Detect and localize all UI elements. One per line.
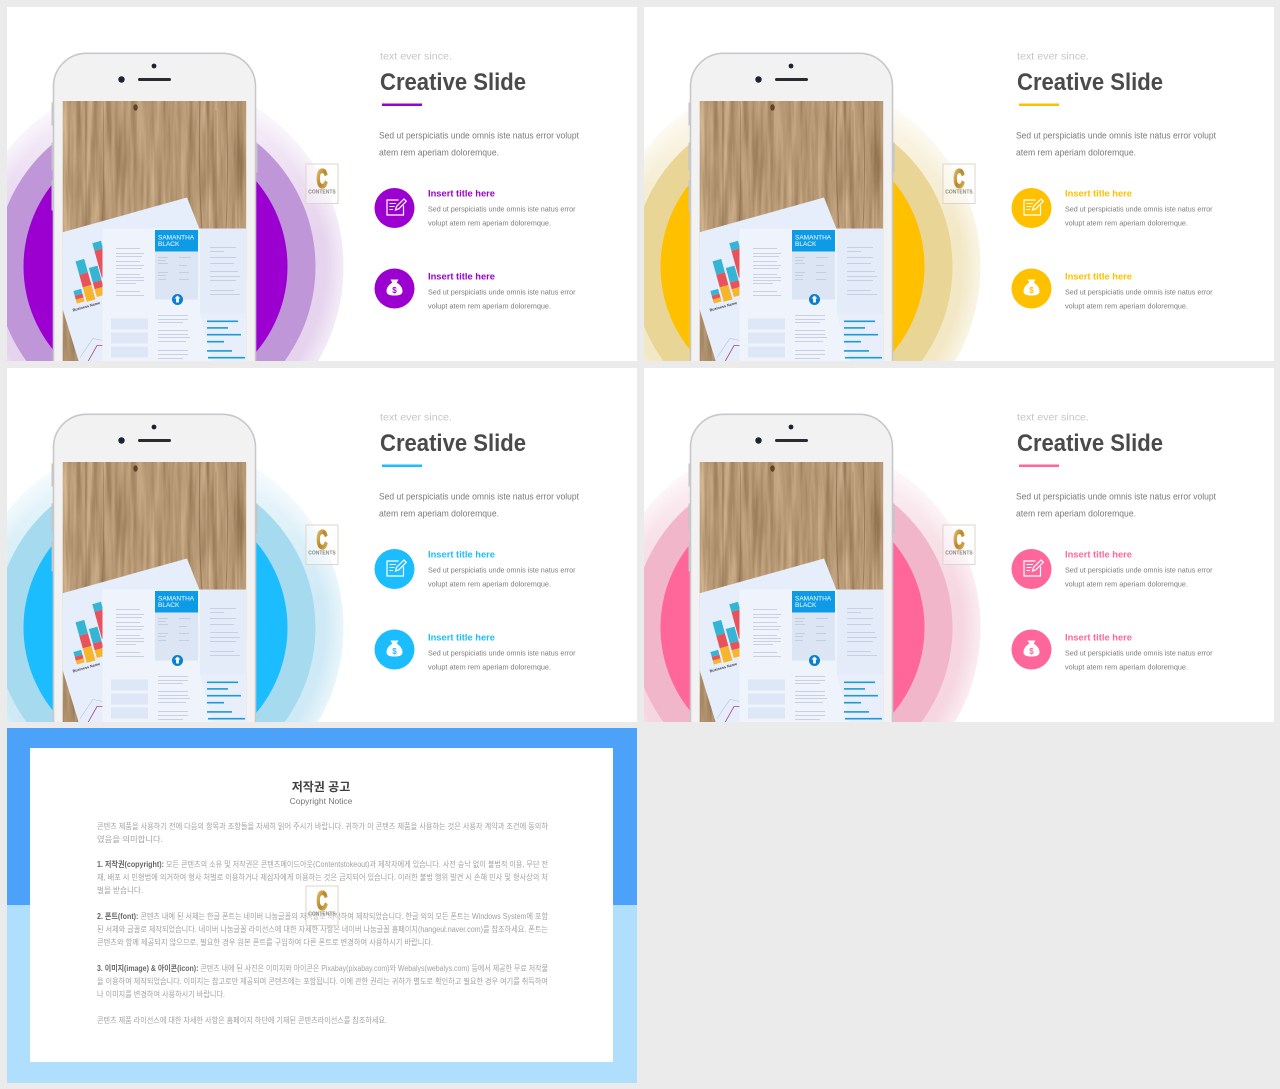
item text 2 [428,287,576,310]
watermark logo [306,886,338,926]
watermark logo: CONTENTS [945,189,973,195]
title: Creative Slide [380,430,526,456]
section 3 image and icon [97,963,548,999]
concentric circles [604,78,980,454]
icon: money bag: $ [1029,286,1034,294]
watermark logo [943,524,975,564]
title: Creative Slide [1017,68,1163,96]
icon: money bag: $ [1029,646,1034,656]
icon: money bag: $ [392,286,397,294]
item text 1: Sed ut perspiciatis unde omnis iste natus error [1065,204,1213,213]
phone mockup with documents [52,53,258,393]
title underline [382,103,422,106]
eyebrow text: text ever since. [1017,411,1089,423]
notice intro: 였음을 의미합니다. [97,834,163,844]
document chart label: Business Name [72,662,101,673]
item text 2: Sed ut perspiciatis unde omnis iste natus error [1065,287,1213,296]
watermark logo [943,163,975,203]
section 1 copyright: 1. 저작권(copyright): 모든 콘텐츠의 소유 및 저작권은 콘텐츠메이드아웃(Contentstokeout)과 제작자에게 있습니다. 사전 승낙 없이 불법적 이용, 무단 전 [97,859,548,869]
intro paragraph: atem rem aperiam doloremque. [1016,508,1136,518]
resume name: SAMANTHA [795,595,831,602]
item text 1: volupt atem rem aperiam doloremque. [1065,218,1188,227]
document chart label: Business Name [72,301,101,312]
intro paragraph [379,491,580,518]
item text 1: Sed ut perspiciatis unde omnis iste natus error [428,204,576,213]
section 1 copyright: 벌을 받습니다. [97,885,143,895]
section 3 image and icon: 을 이용하여 제작되었습니다. 이미지는 참고로만 제공되며 콘텐츠에는 포함됩니다. 이에 관한 권리는 귀하가 별도로 확인하고 필요한 경우 여기를 취득하여 [97,976,548,986]
item text 1 [428,565,576,588]
section 1 copyright [97,859,548,895]
section 1 copyright: 재, 배포 시 민형법에 의거하여 형사 처벌로 이용하거나 제삼자에게 이용하는 것은 금지되어 있습니다. 이러한 불법 행위 발견 시 손해 민사 및 형사상의 처 [97,872,548,882]
icon: money bag [1012,268,1052,308]
item text 1: Sed ut perspiciatis unde omnis iste natus error [428,565,576,574]
title: Creative Slide [380,68,526,96]
item text 2 [1065,287,1213,310]
intro paragraph: atem rem aperiam doloremque. [379,147,499,157]
watermark logo: C [316,524,328,554]
section 2 font: 2. 폰트(font): 콘텐츠 내에 된 서체는 한글 폰트는 네이버 나눔글꼴의 저작물로 제작하여 제작되었습니다. 한글 외의 모든 폰트는 Windows System에 포함 [97,911,548,921]
eyebrow text: text ever since. [380,50,452,62]
item text 1 [1065,204,1213,227]
item text 2: volupt atem rem aperiam doloremque. [428,662,551,671]
licence note: 콘텐츠 제품 라이선스에 대한 자세한 사항은 홈페이지 하단에 기재된 콘텐츠라이선스를 참조하세요. [97,1015,387,1025]
icon: money bag [374,268,414,308]
intro paragraph: Sed ut perspiciatis unde omnis iste natus error volupt [1016,130,1217,140]
eyebrow text: text ever since. [380,411,452,423]
phone mockup with documents [688,53,894,393]
phone mockup with documents [52,414,258,754]
watermark logo: C [954,524,965,554]
title underline [1019,103,1059,106]
item text 1: volupt atem rem aperiam doloremque. [1065,579,1188,588]
notice intro [97,821,548,844]
watermark logo: C [954,163,965,193]
item title 2: Insert title here [428,632,495,642]
watermark logo: C [316,886,328,916]
resume name: SAMANTHA [158,595,194,602]
item text 2: Sed ut perspiciatis unde omnis iste natus error [428,287,576,296]
title: Creative Slide [1017,430,1163,456]
concentric circles [0,78,344,454]
item text 2 [428,648,576,671]
item text 2 [1065,648,1213,671]
document chart label: Business Name [709,301,738,312]
panel: blue slide [7,368,637,722]
resume name: BLACK [795,602,817,608]
item text 2: Sed ut perspiciatis unde omnis iste natus error [428,648,576,657]
title underline [1019,464,1059,466]
intro paragraph: atem rem aperiam doloremque. [379,508,499,518]
resume name: BLACK [795,240,817,248]
watermark logo [306,524,338,564]
notice intro: 콘텐츠 제품을 사용하기 전에 다음의 항목과 조항들을 자세히 읽어 주시기 바랍니다. 귀하가 이 콘텐츠 제품을 사용하는 것은 사용자 계약과 조건에 동의하 [97,821,548,831]
icon: note [374,188,414,228]
item text 1: Sed ut perspiciatis unde omnis iste natus error [1065,565,1213,574]
intro paragraph [1016,130,1217,157]
item text 2: Sed ut perspiciatis unde omnis iste natus error [1065,648,1213,657]
icon: money bag [1012,629,1052,669]
resume name: SAMANTHA [158,234,194,241]
item text 2: volupt atem rem aperiam doloremque. [1065,301,1188,310]
concentric circles [0,439,344,815]
notice card [30,748,613,1062]
section 2 font: 된 서체와 글꼴로 제작되었습니다. 네이버 나눔글꼴 라이선스에 대한 자세한 사항은 네이버 나눔글꼴 홈페이지(hangeul.naver.com)를 참조하세요. 폰트는 [97,924,548,934]
icon: note [374,548,414,588]
item text 1: volupt atem rem aperiam doloremque. [428,579,551,588]
item text 2: volupt atem rem aperiam doloremque. [428,301,551,310]
item text 1 [428,204,576,227]
item title 1: Insert title here [428,549,495,559]
intro paragraph: atem rem aperiam doloremque. [1016,147,1136,157]
watermark logo: CONTENTS [945,550,973,556]
item title 1: Insert title here [1065,188,1132,198]
watermark logo [306,163,338,203]
icon: money bag: $ [392,646,397,656]
intro paragraph [379,130,580,157]
intro paragraph: Sed ut perspiciatis unde omnis iste natus error volupt [1016,491,1217,501]
phone mockup with documents [688,414,894,754]
intro paragraph: Sed ut perspiciatis unde omnis iste natus error volupt [379,130,580,140]
icon: note [1012,548,1052,588]
watermark logo: C [316,163,328,193]
section 3 image and icon: 3. 이미지(image) & 아이콘(icon): 콘텐츠 내에 된 사진은 이미지와 아이콘은 Pixabay(pixabay.com)와 Webalys(webalys.com) 등에서 제공한 무료 저작물 [97,963,548,973]
item title 2: Insert title here [428,271,495,281]
icon: money bag [374,629,414,669]
resume name: BLACK [158,602,180,608]
item title 2: Insert title here [1065,271,1132,281]
panel: copyright notice [7,728,637,1083]
title underline [382,464,422,466]
panel: purple slide [7,7,637,361]
watermark logo: CONTENTS [308,550,336,556]
section 2 font [97,911,548,947]
item text 1 [1065,565,1213,588]
icon: note [1012,188,1052,228]
section 2 font: 콘텐츠와 함께 제공되지 않으므로, 필요한 경우 원본 폰트를 구입하여 다른 폰트로 변경하여 사용하시기 바랍니다. [97,937,433,947]
item text 2: volupt atem rem aperiam doloremque. [1065,662,1188,671]
concentric circles [604,439,980,815]
resume name: BLACK [158,240,180,248]
item title 1: Insert title here [1065,549,1132,559]
item text 1: volupt atem rem aperiam doloremque. [428,218,551,227]
notice heading: 저작권 공고 [292,779,350,794]
section 3 image and icon: 나 이미지를 변경하여 사용하시기 바랍니다. [97,989,225,999]
resume name: SAMANTHA [795,234,831,241]
intro paragraph [1016,491,1217,518]
eyebrow text: text ever since. [1017,50,1089,62]
item title 1: Insert title here [428,188,495,198]
watermark logo: CONTENTS [308,912,336,918]
panel: yellow slide [644,7,1274,361]
intro paragraph: Sed ut perspiciatis unde omnis iste natus error volupt [379,491,580,501]
panel: pink slide [644,368,1274,722]
document chart label: Business Name [709,662,738,673]
watermark logo: CONTENTS [308,189,336,195]
notice subheading: Copyright Notice [290,796,353,806]
item title 2: Insert title here [1065,632,1132,642]
